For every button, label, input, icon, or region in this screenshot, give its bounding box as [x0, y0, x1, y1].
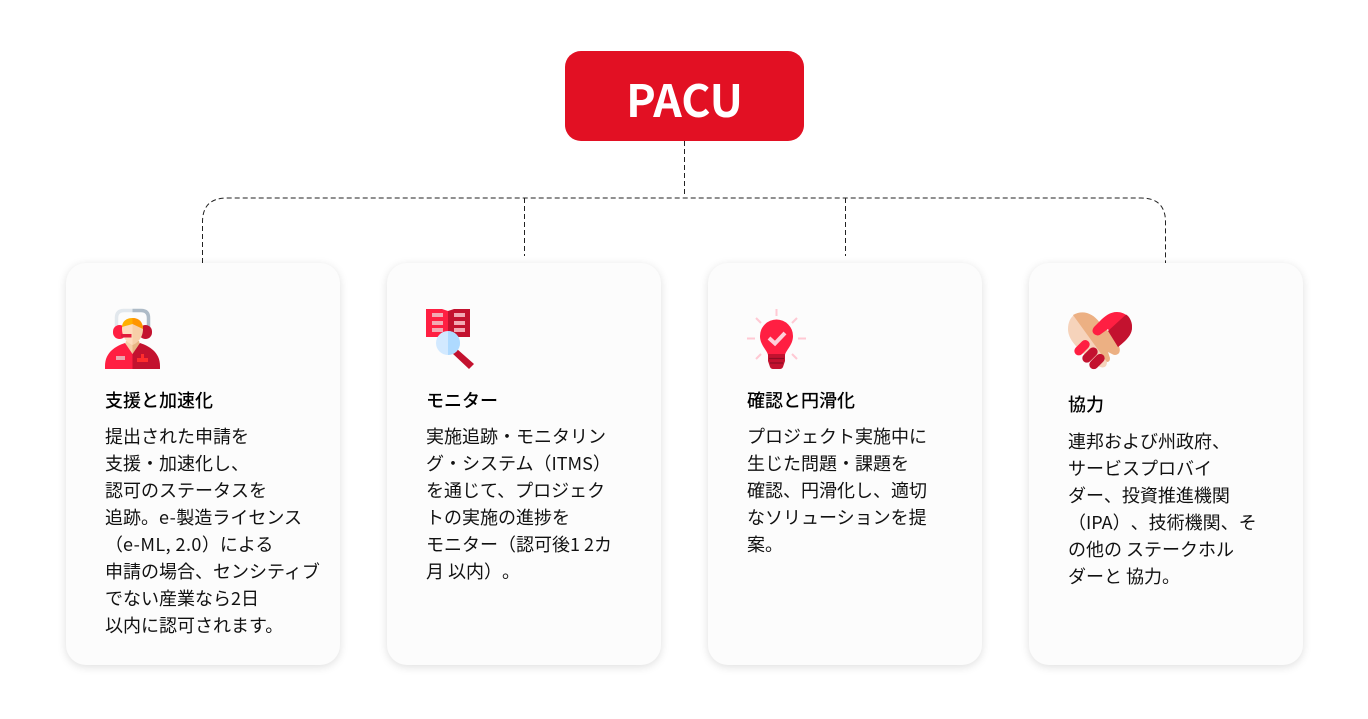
panel: confirmation and facilitation [708, 263, 982, 665]
text block: 申請の場合、センシティブ [105, 558, 320, 584]
text block: ダー、投資推進機関 [1068, 482, 1230, 508]
heading: 支援と加速化 [105, 387, 213, 413]
text block: を通じて、プロジェク [426, 477, 605, 503]
text block: 認可のステータスを [105, 477, 267, 503]
text block: 確認、円滑化し、適切 [747, 477, 927, 503]
text block: 追跡。e-製造ライセンス [105, 504, 302, 530]
heading: 協力 [1068, 391, 1104, 417]
heading: モニター [426, 387, 498, 413]
text block: でない産業なら2日 [105, 585, 259, 611]
text block: （IPA）、技術機関、そ [1068, 509, 1257, 535]
text block: 提出された申請を [105, 423, 249, 449]
text block [1068, 428, 1257, 589]
title box: PACU [565, 51, 804, 141]
text block: の他の ステークホル [1068, 536, 1234, 562]
text block: モニター（認可後1 2カ [426, 531, 612, 557]
icon: handshake heart [1068, 312, 1132, 370]
text block: （e-ML, 2.0）による [105, 531, 273, 557]
text block [426, 423, 612, 584]
text block: 以内に認可されます。 [105, 612, 283, 638]
text block: 支援・加速化し、 [105, 450, 249, 476]
text block: 生じた問題・課題を [747, 450, 909, 476]
text block: プロジェクト実施中に [747, 423, 927, 449]
panel: collaboration [1029, 263, 1303, 665]
text block: サービスプロバイ [1068, 455, 1212, 481]
heading: 確認と円滑化 [747, 387, 855, 413]
text block: グ・システム（ITMS） [426, 450, 611, 476]
text block: ダーと 協力。 [1068, 563, 1180, 589]
icon: book and magnifier [426, 309, 474, 369]
text block: トの実施の進捗を [426, 504, 570, 530]
text block [105, 423, 320, 638]
panel: monitoring [387, 263, 661, 665]
text block: 月 以内）。 [426, 558, 520, 584]
text block: 案。 [747, 531, 783, 557]
panel: support and acceleration [66, 263, 340, 665]
icon: operator with headset [105, 308, 160, 369]
text block: 連邦および州政府、 [1068, 428, 1230, 454]
text block [747, 423, 927, 557]
title box: PACU: PACU [626, 65, 743, 130]
text block: 実施追跡・モニタリン [426, 423, 606, 449]
icon: light bulb with check [747, 309, 806, 369]
text block: なソリューションを提 [747, 504, 927, 530]
